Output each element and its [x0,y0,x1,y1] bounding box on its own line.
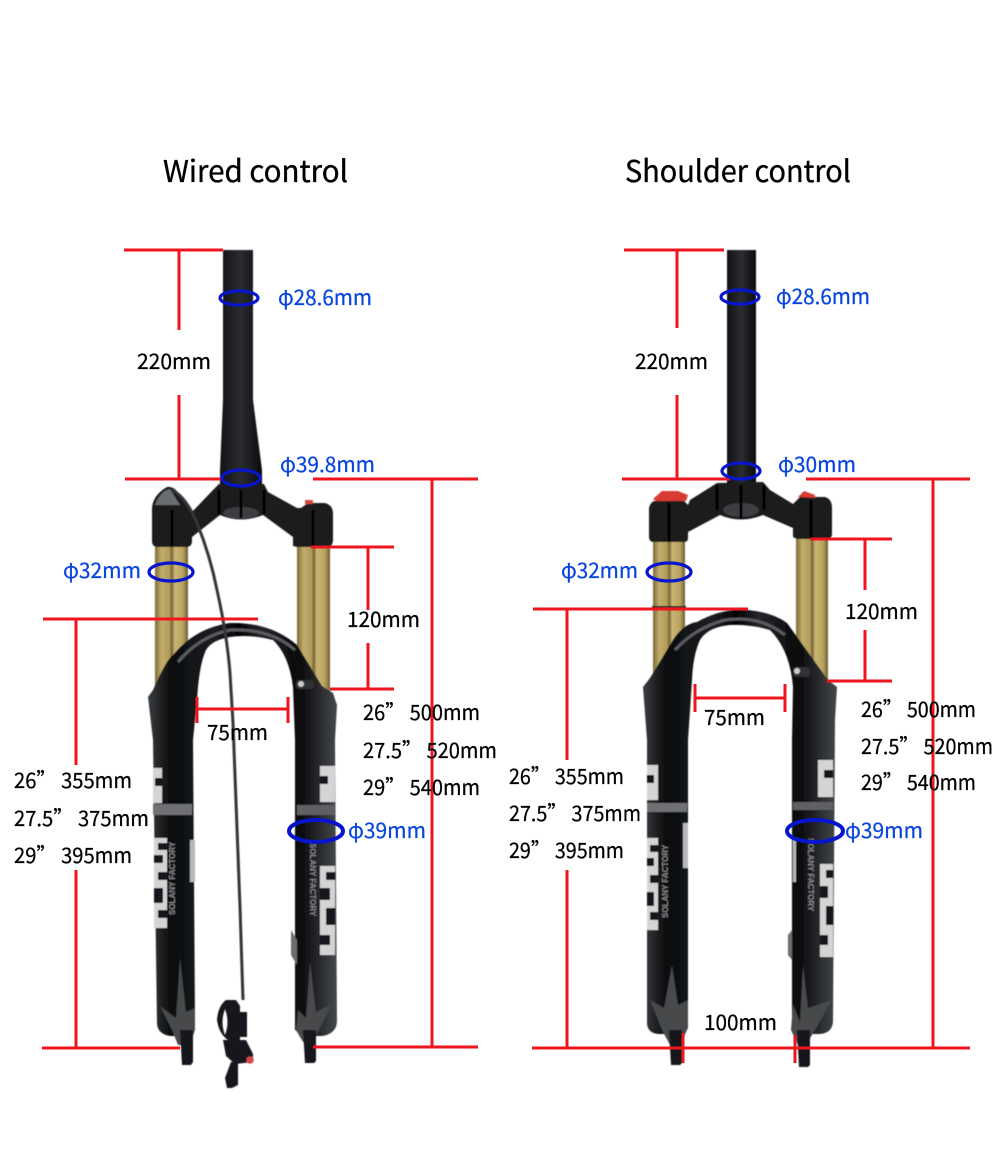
dimension lines: wired control [42,250,478,1048]
labels: shoulder control: 120mm [845,596,918,626]
labels: shoulder control: 26” 355mm [509,761,624,791]
labels: wired control: φ39mm [348,815,426,845]
fork photo: shoulder control [643,250,837,1067]
labels: wired control: φ32mm [63,555,141,585]
dropouts [650,930,832,1067]
arch highlight [178,630,295,662]
labels: wired control: 75mm [207,717,268,747]
labels: wired control: 27.5” 375mm [14,803,149,833]
labels: shoulder control: 220mm [635,346,708,376]
labels: wired control [14,282,497,870]
right leg decal [793,760,833,957]
dimension lines: shoulder control [532,250,970,1063]
arch highlight [675,619,785,650]
labels: shoulder control [509,281,993,1037]
labels: wired control: 26” 355mm [14,765,132,795]
title: Shoulder control: Shoulder control [625,147,851,191]
labels: shoulder control: 29” 540mm [861,767,976,797]
crown [649,482,832,542]
crown [152,484,333,547]
labels: shoulder control: φ30mm [778,449,856,479]
labels: shoulder control: 27.5” 375mm [509,798,641,828]
labels: shoulder control: 27.5” 520mm [861,731,993,761]
steerer tube [727,250,756,490]
labels: wired control: 26” 500mm [363,697,480,727]
labels: shoulder control: 75mm [704,702,765,732]
labels: wired control: φ28.6mm [278,282,372,312]
steerer tube [220,250,262,490]
right leg decal [297,766,335,955]
left leg decal [647,765,688,930]
adjuster bolt [296,680,314,689]
gold stanchions [652,538,828,685]
labels: wired control: 29” 395mm [14,840,132,870]
left leg decal: SOLANY FACTORY [661,844,670,918]
remote lever [217,1000,254,1088]
labels: wired control: 29” 540mm [363,772,480,802]
labels: wired control: φ39.8mm [280,449,375,479]
title: Wired control: Wired control [163,147,348,191]
adjuster bolt [793,667,810,677]
diameter rings: shoulder control [647,290,843,842]
dropouts [160,930,332,1065]
right leg decal: SOLANY FACTORY [308,843,317,917]
labels: shoulder control: φ32mm [561,555,638,585]
labels: shoulder control: 29” 395mm [509,835,624,865]
labels: shoulder control: φ39mm [845,815,923,845]
cable [172,490,243,1000]
labels: wired control: 27.5” 520mm [363,735,497,765]
lower legs and arch [643,610,837,1034]
labels: shoulder control: 100mm [704,1007,777,1037]
lower legs and arch [148,623,337,1036]
labels: shoulder control: φ28.6mm [776,281,870,311]
right leg decal: SOLANY FACTORY [806,838,815,912]
labels: shoulder control: 26” 500mm [861,694,976,724]
labels: wired control: 120mm [347,604,420,634]
left leg decal [153,768,195,928]
fork photo: wired control [148,250,337,1088]
diameter rings: wired control [149,291,343,842]
gold stanchions [155,545,330,695]
labels: wired control: 220mm [137,346,211,376]
left leg decal: SOLANY FACTORY [168,841,177,915]
